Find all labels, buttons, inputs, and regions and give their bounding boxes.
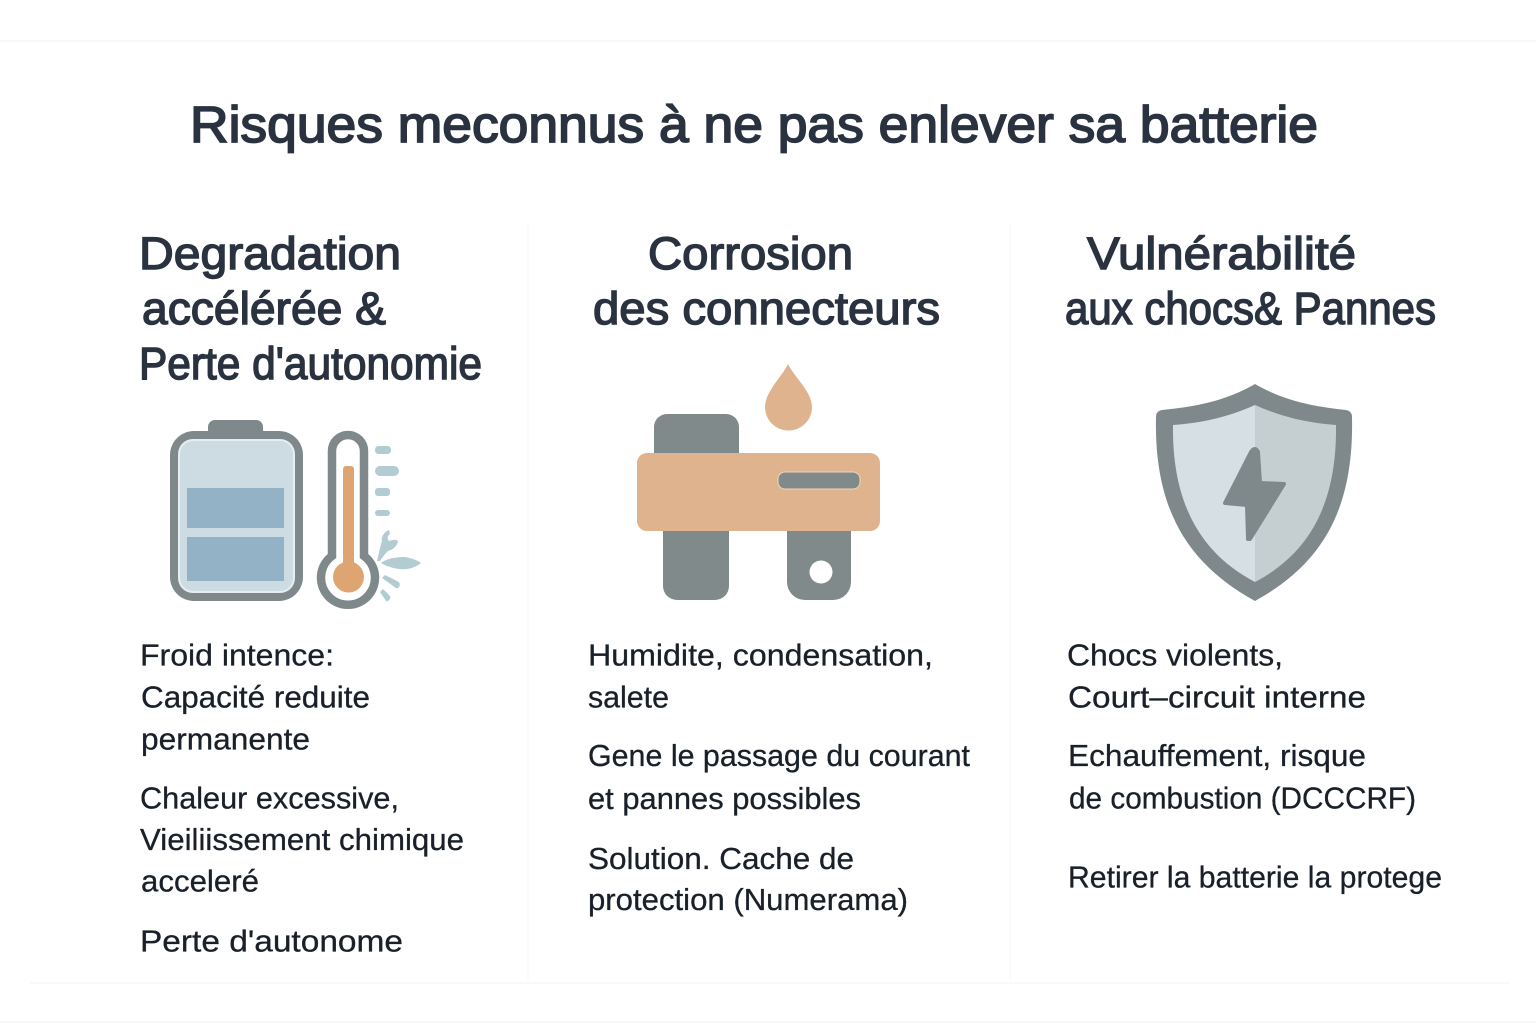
text block: dégradation (140, 638, 464, 958)
text block: corrosion (588, 638, 970, 917)
text block: dégradation: acceleré (141, 864, 259, 898)
heading: corrosion: des connecteurs (593, 283, 940, 334)
heading: dégradation: accélérée & (142, 283, 386, 334)
heading: corrosion (593, 228, 940, 334)
heading: dégradation: Degradation (139, 228, 401, 279)
icon: thermometer (321, 435, 421, 605)
text block: vulnérabilité: Chocs violents, (1067, 638, 1283, 672)
text block: corrosion: Humidite, condensation, (588, 638, 933, 672)
text block: vulnérabilité (1067, 638, 1442, 894)
text block: corrosion: et pannes possibles (588, 781, 861, 816)
text block: corrosion: Gene le passage du courant (588, 738, 970, 773)
text block: dégradation: Capacité reduite (141, 680, 370, 714)
icon: connector with drop (637, 364, 880, 600)
text block: vulnérabilité: Retirer la batterie la protege (1068, 860, 1442, 894)
heading: dégradation (139, 228, 482, 389)
panel: vulnérabilité (1065, 228, 1442, 894)
text block: corrosion: protection (Numerama) (588, 882, 908, 917)
text block: dégradation: permanente (141, 722, 310, 756)
heading: corrosion: Corrosion (648, 228, 853, 279)
text block: corrosion: salete (588, 680, 669, 714)
icon: battery (170, 420, 303, 601)
text block: vulnérabilité: Echauffement, risque (1068, 738, 1366, 773)
text block: corrosion: Solution. Cache de (588, 841, 854, 876)
heading: dégradation: Perte d'autonomie (139, 338, 482, 389)
text block: vulnérabilité: de combustion (DCCCRF) (1069, 780, 1416, 816)
icon: shield with bolt (1156, 384, 1352, 601)
heading: vulnérabilité: aux chocs& Pannes (1065, 283, 1436, 334)
text block: dégradation: Froid intence: (140, 638, 334, 672)
text block: vulnérabilité: Court–circuit interne (1068, 680, 1366, 714)
text block: dégradation: Perte d'autonome (140, 924, 403, 958)
panel: corrosion (588, 228, 970, 917)
text block: dégradation: Vieiliissement chimique (140, 822, 464, 857)
heading: vulnérabilité (1065, 228, 1436, 334)
text block: dégradation: Chaleur excessive, (140, 780, 399, 816)
heading: vulnérabilité: Vulnérabilité (1087, 228, 1356, 279)
title: Risques meconnus à ne pas enlever sa batterie (190, 96, 1318, 153)
panel: dégradation (139, 228, 482, 958)
